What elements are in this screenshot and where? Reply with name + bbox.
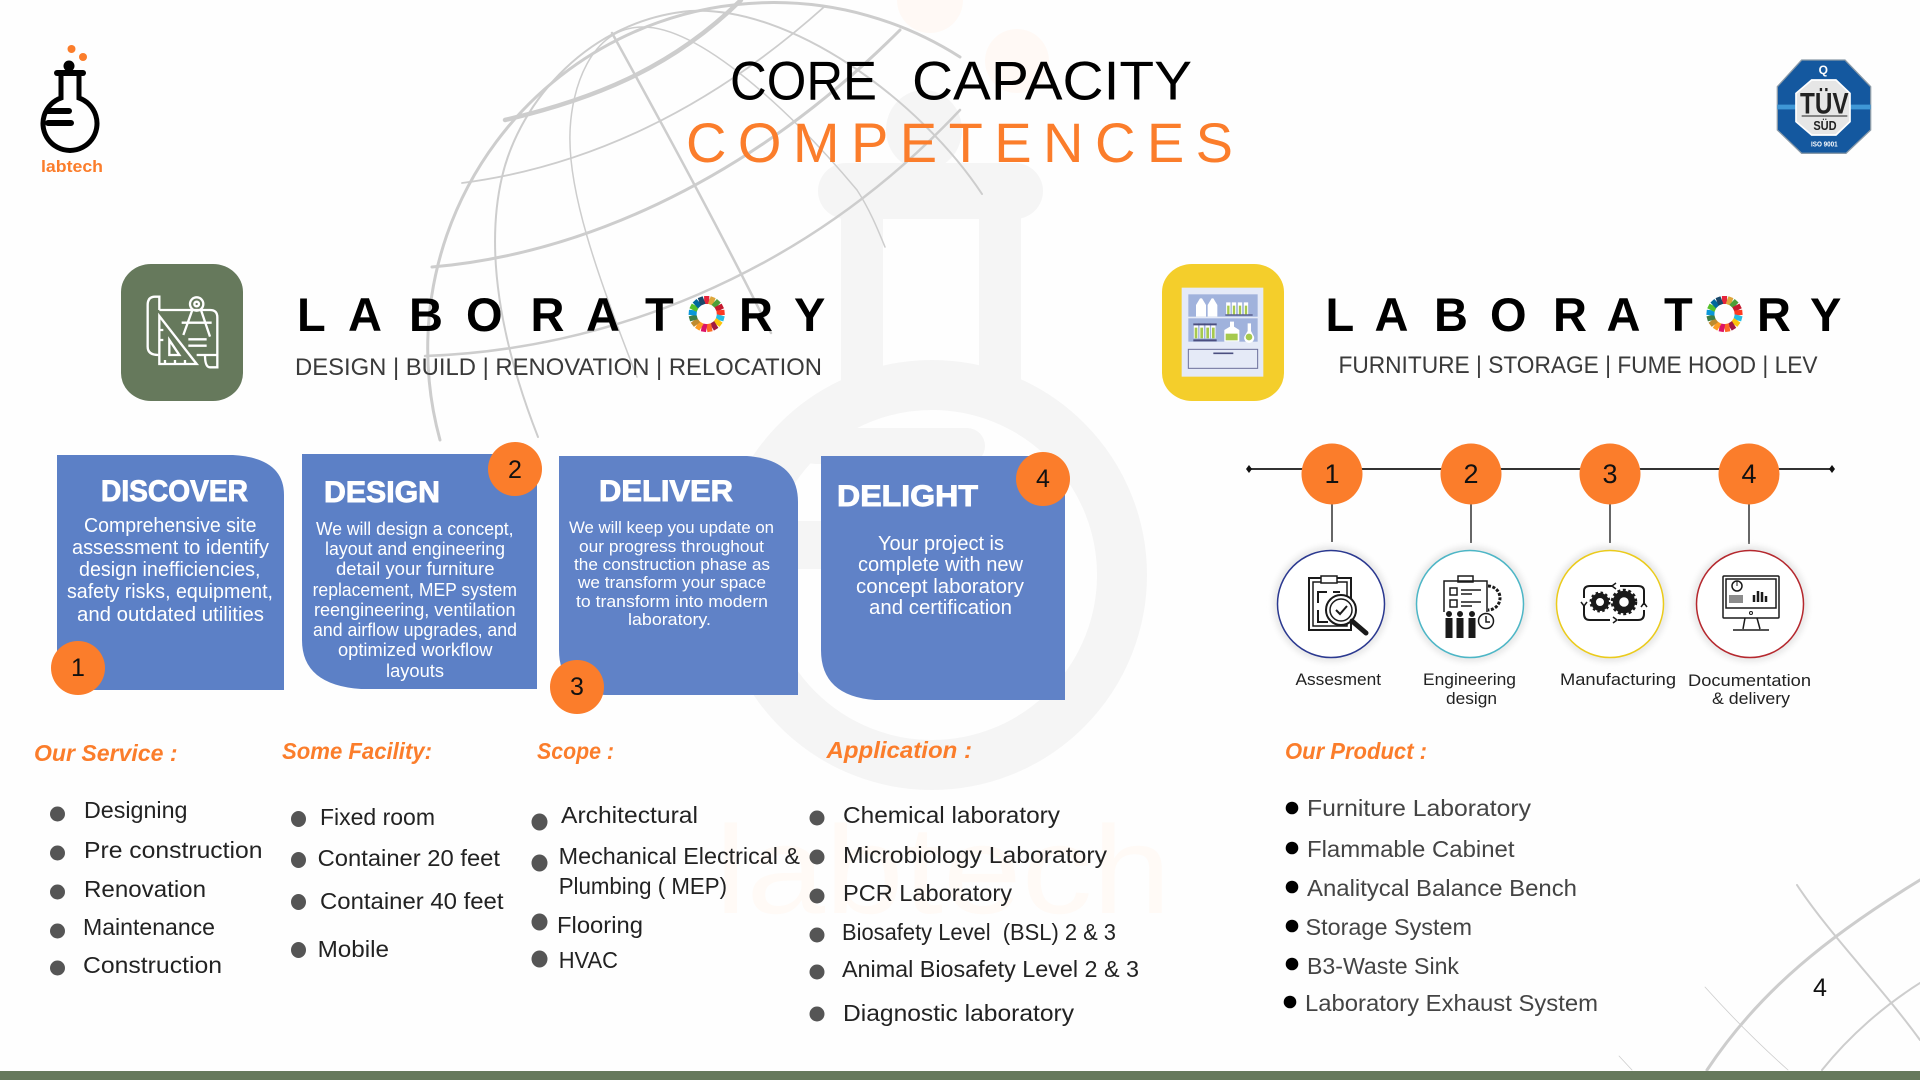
list: application: [810, 737, 1139, 1026]
list: application: Application :: [825, 737, 972, 763]
title: CAPACITY: [912, 50, 1192, 112]
heading: laboratory left: LABORAT: [297, 288, 674, 341]
panel: delight: DELIGHT: [837, 480, 978, 513]
title: [686, 50, 1233, 174]
list: our product: B3-Waste Sink: [1307, 953, 1459, 979]
icon: manufacturing: [1552, 546, 1668, 662]
panel: delight: and certification: [869, 597, 1012, 619]
panel: discover: DISCOVER: [101, 475, 248, 508]
panel: delight: Your project is: [878, 533, 1004, 555]
list: scope: Scope :: [537, 738, 614, 764]
globe wireframe bottom right: [1619, 880, 1920, 1070]
icon tile: lab cabinet: [1162, 264, 1284, 401]
step 2 node: 2: [1463, 459, 1479, 489]
number badge 4: 4: [1036, 465, 1050, 493]
badge: TUV SUD ISO 9001: SÜD: [1813, 118, 1837, 133]
step 2 node: [1440, 444, 1502, 504]
panel: design: We will design a concept,: [316, 518, 514, 539]
list: application: Microbiology Laboratory: [843, 842, 1108, 868]
caption: manufacturing: Manufacturing: [1560, 670, 1676, 689]
list: scope: Mechanical Electrical &: [559, 843, 800, 869]
list: some facility: Container 40 feet: [320, 888, 504, 914]
panel: design: detail your furniture: [336, 558, 494, 579]
panel: deliver: our progress throughout: [579, 537, 764, 556]
panel: deliver: We will keep you update on: [569, 518, 774, 537]
list: our product: Our Product :: [1285, 738, 1427, 764]
list: application: Chemical laboratory: [843, 802, 1061, 828]
list: our service: Pre construction: [84, 837, 262, 863]
number badge 3: [550, 660, 604, 714]
list: application: Biosafety Level (BSL) 2 & 3: [842, 919, 1116, 945]
panel: discover: design inefficiencies,: [79, 559, 260, 581]
step 1 node: 1: [1324, 459, 1340, 489]
watermark: labtech word: labtech: [715, 801, 1171, 940]
list: application: Diagnostic laboratory: [843, 1000, 1075, 1026]
step 4 node: [1718, 444, 1780, 504]
list: our product: Analitycal Balance Bench: [1307, 875, 1577, 901]
heading: laboratory left: RY: [739, 288, 825, 341]
list: our service: [34, 740, 262, 978]
number badge 1: 1: [71, 654, 85, 682]
heading: laboratory right: LABORAT: [1326, 288, 1693, 341]
caption: engineering design: Engineering: [1423, 670, 1516, 689]
panel: design: layouts: [386, 660, 444, 681]
panel: deliver: we transform your space: [577, 573, 766, 592]
step 3 node: [1580, 444, 1640, 504]
list: scope: HVAC: [559, 947, 618, 973]
step 3 node: 3: [1602, 459, 1618, 489]
panel: discover: Comprehensive site: [84, 515, 256, 537]
list: our product: [1284, 738, 1598, 1016]
list: application: PCR Laboratory: [843, 880, 1012, 906]
list: our service: Renovation: [84, 876, 206, 902]
list: application: Animal Biosafety Level 2 & 3: [842, 956, 1139, 982]
caption: documentation and delivery: Documentation: [1688, 671, 1811, 690]
list: our service: Designing: [84, 797, 188, 823]
number badge 1: [51, 641, 105, 695]
title: CORE: [730, 50, 877, 112]
list: some facility: Container 20 feet: [318, 845, 501, 871]
panel: delight: [821, 452, 1070, 700]
icon: SDG wheel left: [689, 296, 725, 332]
badge: TUV SUD ISO 9001: [1777, 60, 1871, 153]
number badge 4: [1016, 452, 1070, 506]
list: scope: [532, 738, 800, 973]
panel: delight: complete with new: [858, 554, 1024, 576]
panel: design: optimized workflow: [338, 639, 493, 660]
list: scope: Plumbing ( MEP): [559, 873, 727, 899]
badge: TUV SUD ISO 9001: Q: [1819, 63, 1828, 77]
step 1 node: [1302, 444, 1362, 504]
number badge 2: [488, 442, 542, 496]
subtitle right: FURNITURE | STORAGE | FUME HOOD | LEV: [1338, 352, 1818, 379]
list: scope: Flooring: [557, 912, 643, 938]
list: some facility: [282, 738, 504, 962]
panel: design: reengineering, ventilation: [314, 599, 516, 620]
subtitle left: DESIGN | BUILD | RENOVATION | RELOCATION: [295, 354, 822, 381]
icon: assessment: [1273, 546, 1389, 662]
caption: documentation and delivery: [1688, 671, 1811, 708]
panel: discover: assessment to identify: [72, 537, 269, 559]
number badge 2: 2: [508, 456, 522, 484]
icon: documentation: [1692, 546, 1808, 662]
panel: discover: and outdated utilities: [77, 604, 264, 626]
number badge 3: 3: [570, 673, 584, 701]
icon: engineering design: [1412, 546, 1528, 662]
watermark: large flask: [742, 0, 1122, 765]
list: scope: Architectural: [561, 802, 698, 828]
timeline: [1246, 444, 1835, 544]
badge: TUV SUD ISO 9001: ISO 9001: [1811, 140, 1838, 149]
panel: design: replacement, MEP system: [313, 579, 517, 600]
list: some facility: Fixed room: [320, 804, 435, 830]
panel: deliver: DELIVER: [599, 475, 733, 508]
footer band: [0, 1071, 1920, 1080]
title: COMPETENCES: [686, 111, 1233, 174]
logo: labtech: [41, 45, 103, 176]
panel: deliver: [550, 456, 798, 714]
page number: 4: [1813, 974, 1827, 1002]
step 4 node: 4: [1741, 459, 1757, 489]
panel: design: [302, 442, 542, 689]
caption: documentation and delivery: & delivery: [1712, 689, 1791, 708]
list: our product: Storage System: [1306, 914, 1472, 940]
caption: assesment: Assesment: [1296, 670, 1381, 689]
list: some facility: Some Facility:: [282, 738, 432, 764]
panel: discover: safety risks, equipment,: [67, 581, 273, 603]
panel: deliver: to transform into modern: [576, 592, 768, 611]
list: our service: Maintenance: [83, 914, 215, 940]
caption: engineering design: design: [1446, 689, 1497, 708]
panel: design: and airflow upgrades, and: [313, 619, 517, 640]
list: our service: Construction: [83, 952, 222, 978]
panel: discover: [51, 455, 284, 695]
badge: TUV SUD ISO 9001: TÜV: [1800, 87, 1849, 120]
panel: deliver: the construction phase as: [574, 555, 770, 574]
panel: design: DESIGN: [324, 476, 440, 509]
caption: engineering design: [1423, 670, 1516, 708]
icon tile: blueprint: [121, 264, 243, 401]
list: our service: Our Service :: [34, 740, 178, 766]
list: our product: Furniture Laboratory: [1307, 795, 1532, 821]
heading: laboratory right: RY: [1757, 288, 1841, 341]
panel: design: layout and engineering: [325, 538, 505, 559]
list: our product: Laboratory Exhaust System: [1305, 990, 1598, 1016]
panel: delight: concept laboratory: [856, 576, 1024, 598]
logo: labtech: labtech: [41, 157, 103, 176]
globe wireframe top: [425, 0, 982, 440]
list: our product: Flammable Cabinet: [1307, 836, 1515, 862]
list: some facility: Mobile: [318, 936, 389, 962]
icon: SDG wheel right: [1706, 296, 1743, 332]
panel: deliver: laboratory.: [628, 610, 711, 629]
